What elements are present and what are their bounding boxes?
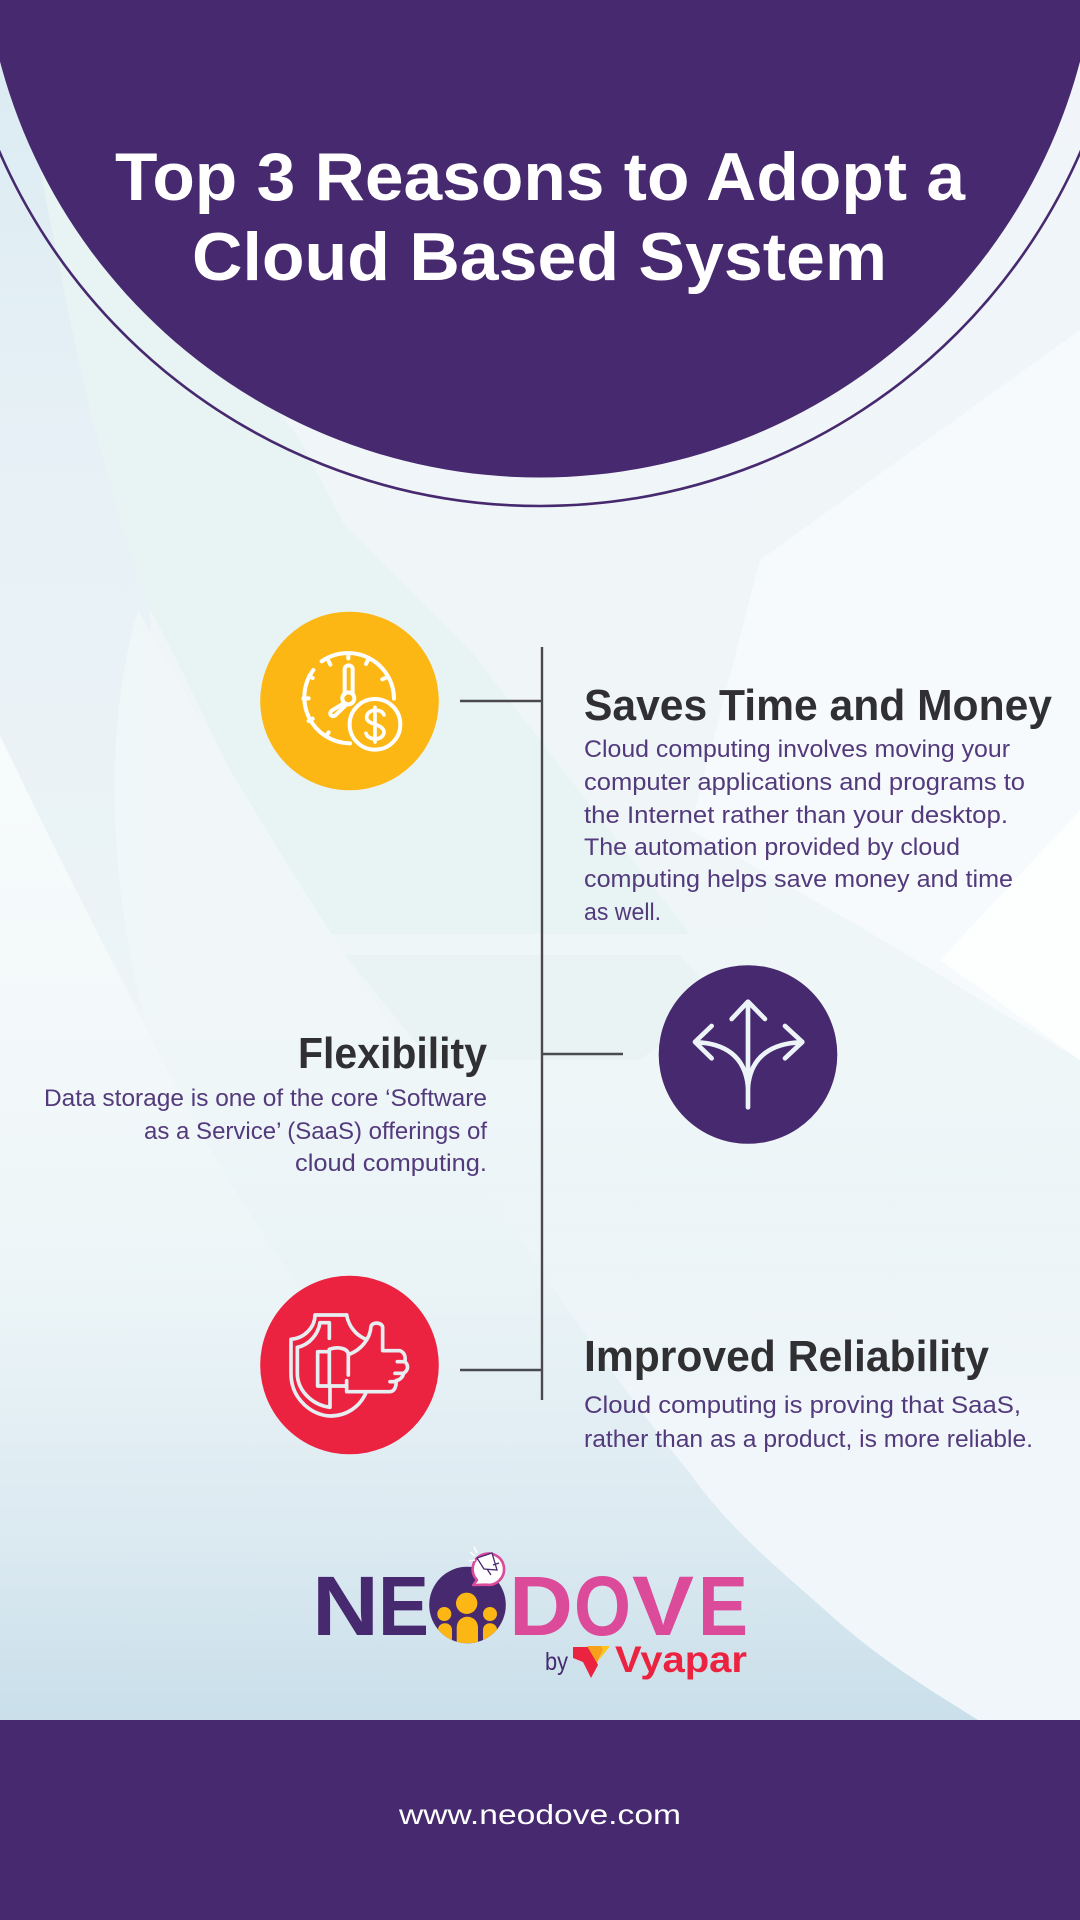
heading: saves time and money: Saves Time and Money xyxy=(584,681,1052,730)
connector: improved reliability xyxy=(460,1369,542,1371)
icon: three way arrows xyxy=(659,965,837,1144)
logo wordmark: dove: O xyxy=(574,1559,631,1653)
vyapar wordmark: Vyapar xyxy=(615,1639,747,1680)
logo wordmark: dove: E xyxy=(698,1559,748,1653)
text block: saves time and money: as well. xyxy=(584,899,661,926)
logo wordmark: dove: V xyxy=(632,1559,694,1653)
footer url: www.neodove.com xyxy=(398,1799,681,1830)
icon: clock and dollar xyxy=(260,612,439,790)
logo wordmark: ne: N xyxy=(312,1559,379,1653)
logo wordmark: dove: D xyxy=(509,1559,573,1653)
text block: flexibility: as a Service’ (SaaS) offerings of xyxy=(144,1118,487,1145)
logo: neodove by vyapar xyxy=(312,1547,748,1680)
text block: flexibility: cloud computing. xyxy=(295,1150,487,1177)
text block: improved reliability xyxy=(584,1332,1033,1453)
heading: improved reliability: Improved Reliability xyxy=(584,1332,990,1381)
text block: flexibility xyxy=(44,1029,487,1177)
timeline spine xyxy=(541,647,543,1400)
text block: flexibility: Data storage is one of the core ‘Software xyxy=(44,1085,487,1112)
title xyxy=(115,139,966,295)
title: Top 3 Reasons to Adopt a xyxy=(115,139,966,215)
text block: saves time and money: The automation provided by cloud xyxy=(584,834,960,861)
footer bar xyxy=(0,1720,1080,1920)
text block: saves time and money xyxy=(584,681,1052,926)
header semicircle xyxy=(0,0,1080,478)
heading: flexibility: Flexibility xyxy=(298,1029,487,1078)
icon: shield and thumbs up xyxy=(260,1276,439,1454)
logo wordmark: ne xyxy=(312,1559,429,1653)
logo wordmark: ne: E xyxy=(378,1559,429,1653)
title: Cloud Based System xyxy=(192,219,887,295)
connector: flexibility xyxy=(542,1053,623,1055)
text block: saves time and money: the Internet rather than your desktop. xyxy=(584,802,1008,829)
connector: saves time and money xyxy=(460,700,542,702)
logo emblem xyxy=(429,1547,506,1645)
text block: saves time and money: Cloud computing involves moving your xyxy=(584,736,1010,763)
header outline arc xyxy=(0,0,1080,506)
vyapar mark xyxy=(573,1646,610,1678)
by label: by xyxy=(545,1648,568,1676)
text block: saves time and money: computing helps save money and time xyxy=(584,866,1013,893)
text block: improved reliability: rather than as a product, is more reliable. xyxy=(584,1426,1033,1453)
text block: saves time and money: computer applications and programs to xyxy=(584,769,1025,796)
logo wordmark: dove xyxy=(509,1559,748,1653)
text block: improved reliability: Cloud computing is proving that SaaS, xyxy=(584,1392,1021,1419)
